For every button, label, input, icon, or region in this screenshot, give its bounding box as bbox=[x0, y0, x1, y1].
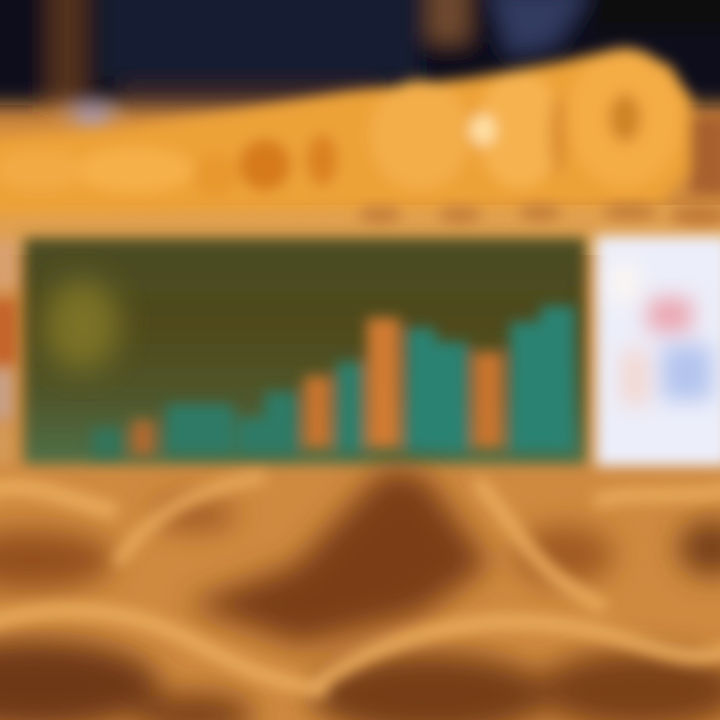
left edge accent bbox=[0, 240, 20, 465]
bar chart: teal and orange bars bbox=[92, 306, 575, 456]
scalloped letter lobes bbox=[567, 48, 683, 188]
side card coloured content bbox=[612, 265, 712, 405]
panel: white side card bbox=[596, 236, 720, 466]
background: night sky bbox=[0, 0, 720, 127]
title shadow scallops bbox=[358, 203, 720, 227]
illustration: dune crest highlights bbox=[0, 478, 720, 690]
panel: bar chart bbox=[24, 238, 586, 464]
illustration: sand dunes bbox=[0, 468, 720, 720]
title: glowing headline lettering bbox=[0, 48, 720, 215]
icon: faint circular emblem bbox=[44, 279, 120, 371]
